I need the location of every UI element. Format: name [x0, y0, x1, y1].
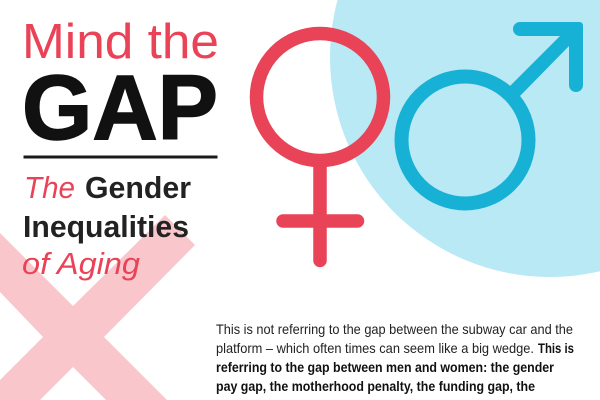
body line 4 bold: pay gap, the motherhood penalty, the funding gap, the: [216, 378, 535, 394]
subtitle: The Gender Inequalities of Aging: [22, 170, 191, 281]
pink X mark: [0, 215, 195, 400]
title: Mind the GAP: [22, 15, 219, 159]
title rule: [24, 156, 218, 158]
subtitle line: of Aging: of Aging: [22, 246, 140, 281]
body paragraph: [216, 321, 574, 394]
title line: Mind the: Mind the: [22, 15, 219, 69]
background circle: light blue: [330, 0, 600, 277]
subtitle word: Gender: Gender: [85, 170, 191, 205]
body line 3 bold: referring to the gap between men and women: the gender: [216, 359, 554, 375]
body line 2 bold: This is: [538, 340, 574, 356]
body line 2 regular: platform – which often times can seem like a big wedge.: [216, 340, 534, 356]
icon: male symbol: [402, 22, 583, 204]
body line 1: This is not referring to the gap between the subway car and the: [216, 321, 573, 337]
subtitle word: The: The: [24, 170, 75, 205]
title line: GAP: GAP: [22, 57, 218, 159]
subtitle line: Inequalities: Inequalities: [23, 209, 189, 244]
icon: female symbol: [256, 34, 384, 260]
